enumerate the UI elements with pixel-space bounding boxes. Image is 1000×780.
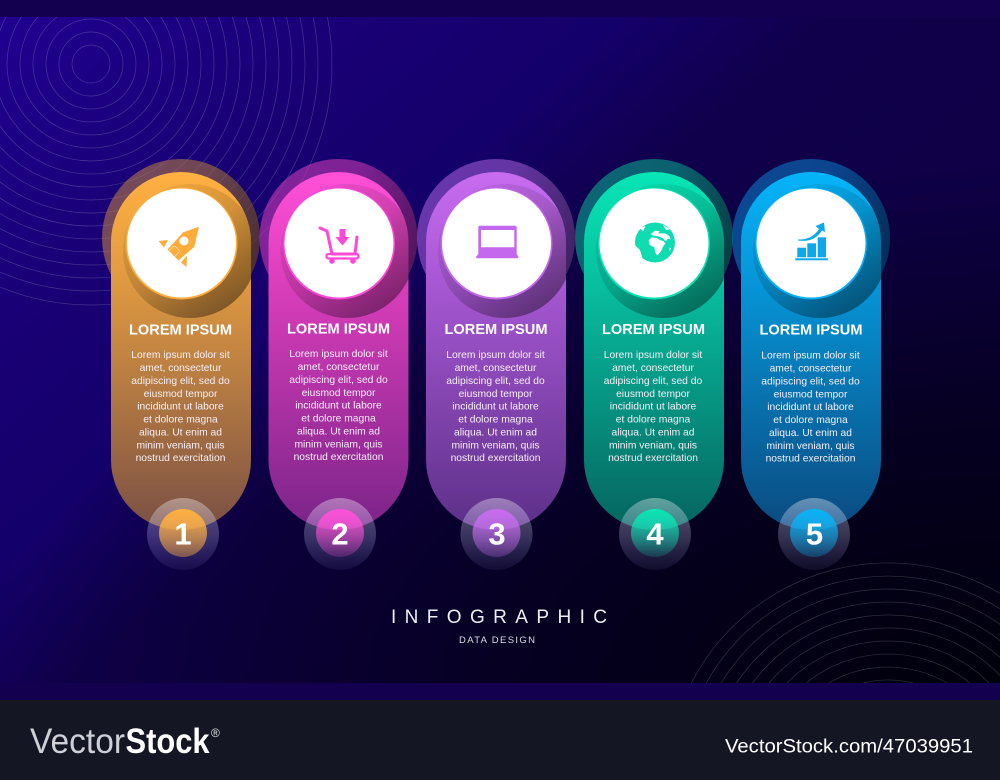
body 5: minim veniam, quis	[766, 441, 855, 452]
pill 1	[111, 172, 251, 530]
number 2: 2	[331, 516, 349, 552]
number 1	[147, 498, 219, 570]
panel: step 2	[260, 159, 418, 570]
body 3: amet, consectetur	[455, 363, 537, 374]
body 2: eiusmod tempor	[302, 388, 376, 399]
badge 3	[440, 188, 552, 300]
body 5: nostrud exercitation	[766, 454, 856, 464]
body 5: eiusmod tempor	[774, 390, 848, 400]
number 4: 4	[646, 516, 664, 552]
body 2: et dolore magna	[301, 414, 376, 424]
body 4: adipiscing elit, sed do	[604, 376, 702, 387]
body 3: eiusmod tempor	[459, 389, 533, 400]
body 2: aliqua. Ut enim ad	[297, 426, 380, 438]
body 4: et dolore magna	[616, 414, 690, 426]
body 2: Lorem ipsum dolor sit	[289, 349, 388, 360]
body 5: et dolore magna	[773, 415, 848, 426]
heading 4: LOREM IPSUM	[602, 322, 705, 338]
shadow 1	[123, 184, 257, 318]
icon: bar chart	[795, 222, 828, 260]
panel: step 4	[575, 159, 733, 570]
footer logo: Vector	[30, 722, 125, 761]
footer logo: ®	[211, 726, 220, 740]
body 1: adipiscing elit, sed do	[131, 376, 230, 387]
body 4	[604, 350, 702, 464]
body 5: adipiscing elit, sed do	[761, 376, 860, 388]
subtitle: DATA DESIGN	[459, 635, 535, 646]
body 4: incididunt ut labore	[610, 402, 696, 412]
body 5	[761, 350, 860, 464]
body 4: Lorem ipsum dolor sit	[604, 350, 702, 361]
halo 4	[575, 159, 733, 317]
halo 2	[260, 159, 418, 317]
body 1: Lorem ipsum dolor sit	[131, 350, 230, 361]
body 1: incididunt ut labore	[137, 402, 224, 412]
body 3	[446, 350, 545, 464]
body 1	[131, 350, 230, 464]
body 4: nostrud exercitation	[608, 453, 698, 464]
shadow 2	[280, 184, 414, 318]
badge 1	[126, 188, 238, 300]
body 1: nostrud exercitation	[136, 453, 226, 464]
heading 1: LOREM IPSUM	[129, 322, 232, 338]
footer url: VectorStock.com/47039951	[725, 736, 973, 758]
body 3: nostrud exercitation	[451, 453, 541, 464]
body 1: eiusmod tempor	[144, 389, 218, 400]
halo 1	[102, 159, 260, 317]
icon: globe	[635, 222, 675, 262]
footer logo	[30, 722, 220, 761]
badge 2	[283, 188, 395, 300]
body 1: amet, consectetur	[140, 363, 222, 374]
shadow 5	[753, 184, 887, 318]
body 2: amet, consectetur	[298, 362, 380, 373]
body 2: nostrud exercitation	[294, 452, 384, 463]
pill 2	[268, 172, 408, 530]
panel: step 1	[102, 159, 260, 570]
body 3: minim veniam, quis	[451, 440, 540, 452]
halo 3	[417, 159, 575, 317]
body 5: Lorem ipsum dolor sit	[761, 350, 860, 362]
badge 5	[755, 188, 867, 300]
concentric rings top left	[0, 0, 332, 305]
body 2: incididunt ut labore	[295, 400, 382, 412]
heading 5: LOREM IPSUM	[760, 322, 862, 338]
body 3: Lorem ipsum dolor sit	[446, 350, 545, 361]
body 4: amet, consectetur	[612, 363, 694, 374]
body 5: aliqua. Ut enim ad	[769, 428, 852, 439]
heading 3: LOREM IPSUM	[445, 322, 547, 338]
body 3: adipiscing elit, sed do	[446, 376, 545, 387]
body 3: aliqua. Ut enim ad	[454, 428, 537, 438]
pill 4	[584, 172, 724, 530]
pill 3	[426, 172, 566, 530]
halo 5	[732, 159, 890, 317]
icon: cart	[320, 228, 358, 264]
panel: step 5	[732, 159, 890, 570]
number 1: 1	[174, 516, 192, 552]
heading 2: LOREM IPSUM	[287, 322, 390, 338]
number 3	[460, 498, 532, 570]
number 3: 3	[488, 516, 506, 552]
number 2	[304, 498, 376, 570]
panel: step 3	[417, 159, 575, 570]
icon: laptop	[476, 226, 518, 258]
body 4: minim veniam, quis	[609, 440, 697, 452]
shadow 4	[596, 184, 730, 318]
badge 4	[598, 188, 710, 300]
footer bar	[0, 700, 1000, 780]
body 5: incididunt ut labore	[767, 402, 854, 413]
title: INFOGRAPHIC	[391, 607, 607, 628]
icon: rocket	[158, 227, 199, 267]
footer logo: Stock	[126, 722, 210, 761]
body 2: adipiscing elit, sed do	[289, 375, 388, 386]
concentric rings bottom right	[691, 563, 1000, 683]
body 4: eiusmod tempor	[616, 389, 690, 400]
body 3: incididunt ut labore	[452, 402, 539, 412]
body 1: minim veniam, quis	[136, 440, 225, 452]
number 5	[778, 498, 850, 570]
body 2: minim veniam, quis	[294, 440, 383, 450]
body 3: et dolore magna	[458, 414, 533, 426]
body 4: aliqua. Ut enim ad	[612, 428, 695, 438]
body 2	[289, 349, 388, 463]
number 5: 5	[806, 516, 823, 552]
body 1: aliqua. Ut enim ad	[139, 428, 222, 438]
pill 5	[741, 172, 881, 530]
body 1: et dolore magna	[143, 414, 218, 426]
body 5: amet, consectetur	[770, 364, 852, 374]
shadow 3	[438, 184, 572, 318]
number 4	[619, 498, 691, 570]
